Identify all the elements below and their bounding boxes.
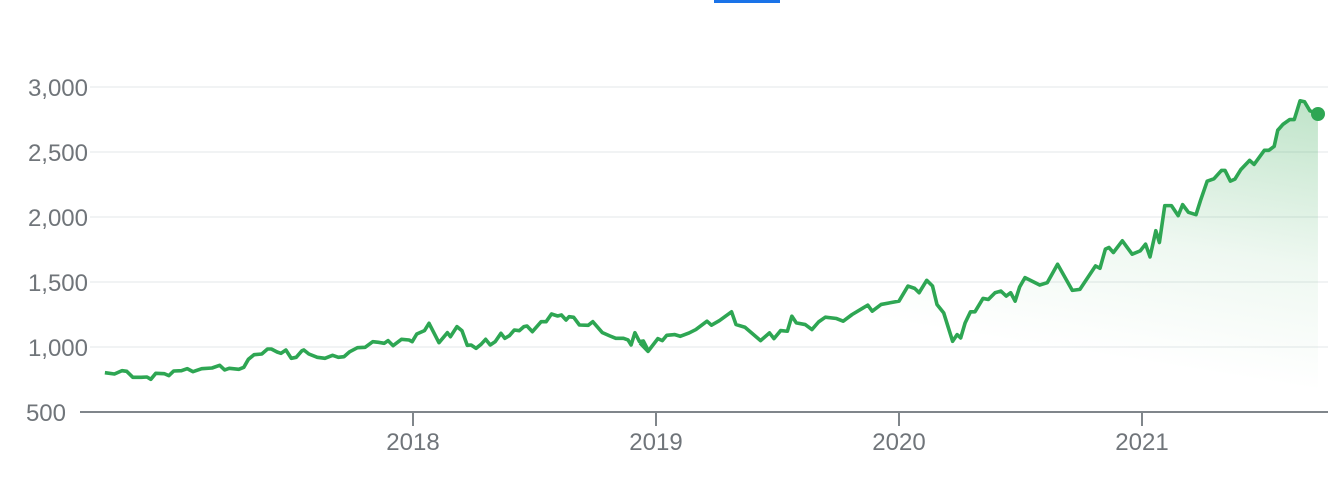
x axis labels: 2019 [629, 429, 683, 456]
y axis labels [26, 75, 88, 427]
area fill under recent line [640, 101, 1318, 412]
y axis labels: 2,000 [28, 205, 88, 232]
end point marker [1311, 107, 1325, 121]
y axis labels: 1,000 [28, 335, 88, 362]
x axis labels: 2020 [872, 429, 926, 456]
y axis labels: 2,500 [28, 140, 88, 167]
x axis labels: 2021 [1115, 429, 1169, 456]
x axis labels: 2018 [386, 429, 440, 456]
x axis labels [386, 429, 1169, 456]
x axis line with ticks [80, 412, 1328, 426]
y axis labels: 500 [26, 400, 66, 427]
tab indicator [714, 0, 780, 3]
y axis labels: 1,500 [28, 270, 88, 297]
y axis labels: 3,000 [28, 75, 88, 102]
price line [105, 101, 1318, 379]
